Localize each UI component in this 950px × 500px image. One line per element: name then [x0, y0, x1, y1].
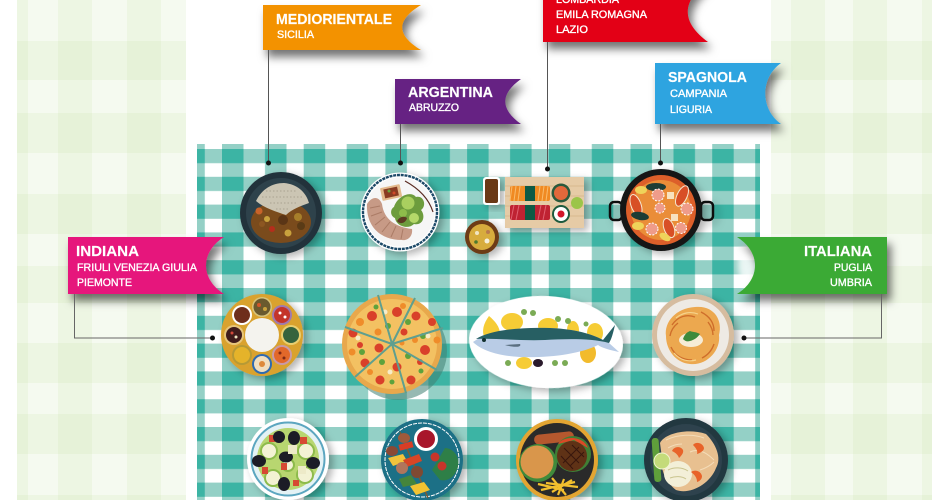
region list: ABRUZZO [409, 102, 459, 114]
dish: paella pan [610, 169, 713, 251]
region list: EMILA ROMAGNA [556, 9, 648, 21]
connector: Spagnola to paella [658, 124, 663, 166]
title: Spagnola: SPAGNOLA [668, 70, 748, 86]
region list: SICILIA [277, 29, 315, 41]
herbs and olive [505, 309, 588, 366]
connector: Argentina to meat plate [398, 124, 403, 166]
connector: Indiana to thali [74, 294, 215, 340]
callout: Indiana [68, 237, 224, 294]
connector: Mediorientale to curry [266, 50, 271, 166]
connector: red banner to sushi [545, 42, 550, 172]
region list: PUGLIA [834, 262, 873, 274]
region list [670, 88, 728, 116]
dish: pad thai noodles [644, 418, 728, 500]
dish: sushi board with sauce and miso soup [465, 177, 584, 254]
soy sauce cup [483, 177, 500, 205]
callout: Spagnola [655, 63, 781, 124]
dish: spaghetti plate [652, 294, 734, 376]
region list: PIEMONTE [77, 277, 132, 289]
dish: burger and fries [516, 419, 598, 500]
region list [556, 0, 648, 36]
panel: right green gingham background [771, 0, 932, 500]
title: Indiana: INDIANA [76, 244, 140, 260]
panel: teal checkered tablecloth [197, 144, 760, 500]
region list: LAZIO [556, 24, 588, 36]
miso soup bowl [465, 220, 499, 254]
callout: Argentina [395, 79, 521, 124]
connector: Italiana to spaghetti [742, 294, 882, 340]
callout: red banner (regions list, cropped at top) [543, 0, 708, 42]
dish: curry with rice [240, 172, 322, 254]
callout: Italiana [737, 237, 887, 294]
region list [830, 262, 873, 289]
title: Argentina: ARGENTINA [408, 85, 494, 101]
callout: Mediorientale [263, 5, 421, 50]
lemons [483, 313, 603, 369]
fish [473, 325, 619, 357]
region list: LIGURIA [670, 104, 713, 116]
region list [77, 262, 198, 289]
region list: CAMPANIA [670, 88, 728, 100]
region list: FRIULI VENEZIA GIULIA [77, 262, 198, 274]
title: Italiana: ITALIANA [804, 244, 873, 260]
sushi board [505, 177, 584, 228]
dish: sliced meat with salad [360, 172, 440, 252]
region list: UMBRIA [830, 277, 873, 289]
dish: thali platter [221, 294, 303, 376]
title: Mediorientale: MEDIORIENTALE [276, 12, 392, 28]
panel: left green gingham background [17, 0, 186, 500]
dish: fish on oval plate [467, 292, 625, 392]
dish: meat skewers [381, 419, 463, 500]
dish: sliced pizza [342, 294, 447, 400]
dish: Greek salad [247, 418, 329, 500]
